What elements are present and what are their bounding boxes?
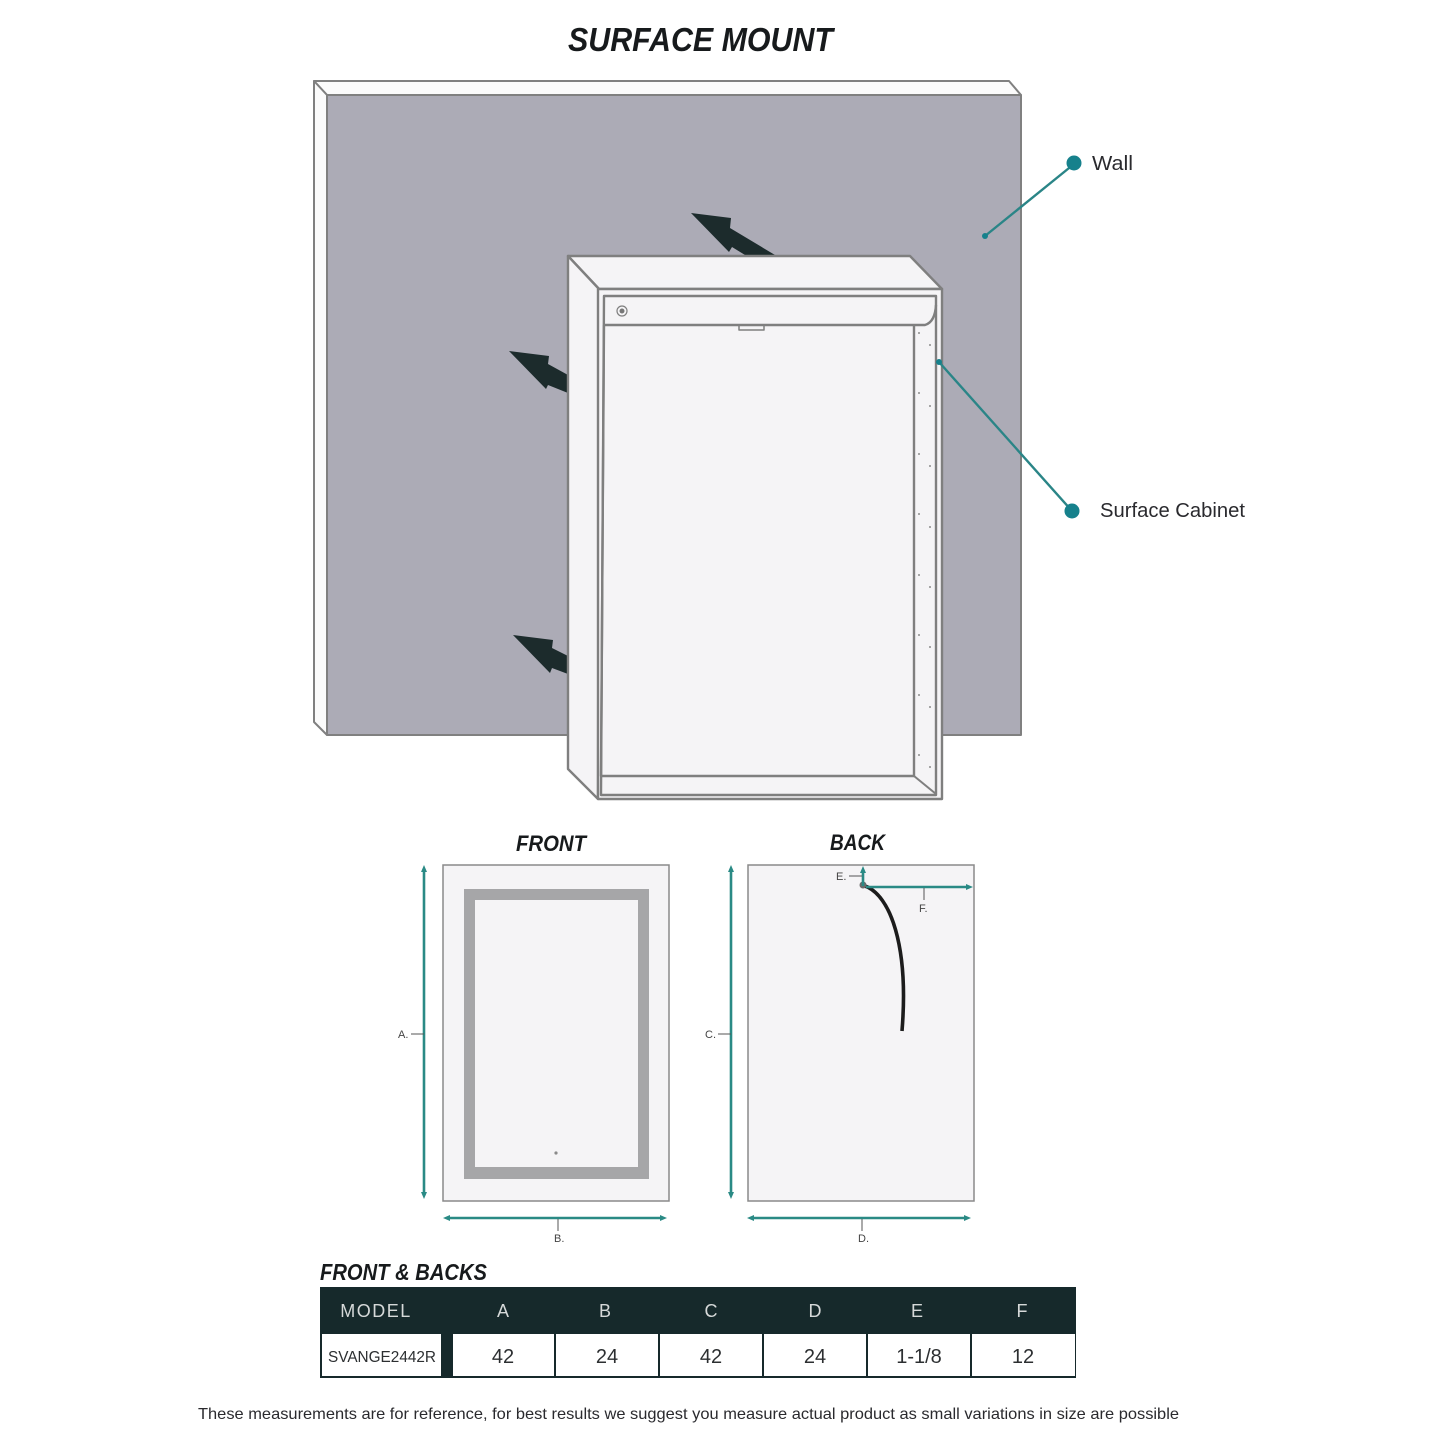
label D: D.: [858, 1233, 869, 1245]
table header labels: D: [808, 1301, 822, 1321]
heading: front and backs: FRONT & BACKS: [320, 1259, 488, 1285]
label A: [398, 1029, 424, 1041]
table header labels: B: [599, 1301, 611, 1321]
title: SURFACE MOUNT: [568, 21, 836, 58]
light frame: [464, 889, 649, 1179]
surface cabinet: [568, 256, 942, 799]
table header labels: E: [911, 1301, 923, 1321]
dimension D: [747, 1215, 971, 1221]
dimension B: [443, 1215, 667, 1221]
callout: surface cabinet: [936, 359, 1245, 522]
label C: C.: [705, 1029, 716, 1041]
callout: wall: Wall: [1092, 153, 1133, 175]
arrow: lower left: [513, 635, 568, 674]
panel: front view: [398, 865, 669, 1245]
callout: surface cabinet: Surface Cabinet: [1100, 500, 1245, 522]
footnote: These measurements are for reference, for best results we suggest you measure actual product as small variations in size are possible: [198, 1406, 1179, 1423]
arrow: middle left: [509, 351, 568, 393]
panel: back view: [705, 865, 974, 1245]
heading: front: FRONT: [516, 831, 587, 856]
table header labels: C: [704, 1301, 718, 1321]
label A: A.: [398, 1029, 408, 1041]
table values: 24: [804, 1346, 826, 1368]
label D: [858, 1219, 869, 1245]
label C: [705, 1029, 731, 1041]
table header labels: MODEL: [340, 1301, 412, 1321]
label E: [836, 871, 862, 883]
label F: [919, 888, 928, 915]
table value cells: [322, 1334, 1075, 1376]
cable port: [860, 882, 866, 888]
mirror back: [748, 865, 974, 1201]
dimension F: [866, 884, 973, 890]
table values: 24: [596, 1346, 618, 1368]
mirror body: [443, 865, 669, 1201]
dimension C: [728, 865, 734, 1199]
table background: [320, 1287, 1076, 1378]
dimension A: [421, 865, 427, 1199]
label B: [554, 1219, 564, 1245]
label B: B.: [554, 1233, 564, 1245]
table values: 42: [492, 1346, 514, 1368]
label F: F.: [919, 903, 928, 915]
arrow: top: [691, 213, 775, 255]
table values: [328, 1346, 1034, 1368]
panel: surface mount diagram: [314, 81, 1245, 799]
callout: wall: [982, 153, 1133, 239]
table values: 12: [1012, 1346, 1034, 1368]
power cable: [865, 886, 903, 1031]
dimension E: [860, 866, 866, 886]
table: measurements: [320, 1287, 1076, 1378]
table header labels: A: [497, 1301, 509, 1321]
screw holes: [918, 332, 931, 768]
touch sensor: [554, 1151, 558, 1155]
heading: back: BACK: [830, 830, 887, 855]
label E: E.: [836, 871, 846, 883]
table header labels: F: [1016, 1301, 1028, 1321]
wall: [314, 81, 1021, 735]
table values: 42: [700, 1346, 722, 1368]
table values: 1-1/8: [896, 1346, 942, 1368]
table values: SVANGE2442R: [328, 1349, 436, 1366]
table header labels: [340, 1301, 1028, 1321]
